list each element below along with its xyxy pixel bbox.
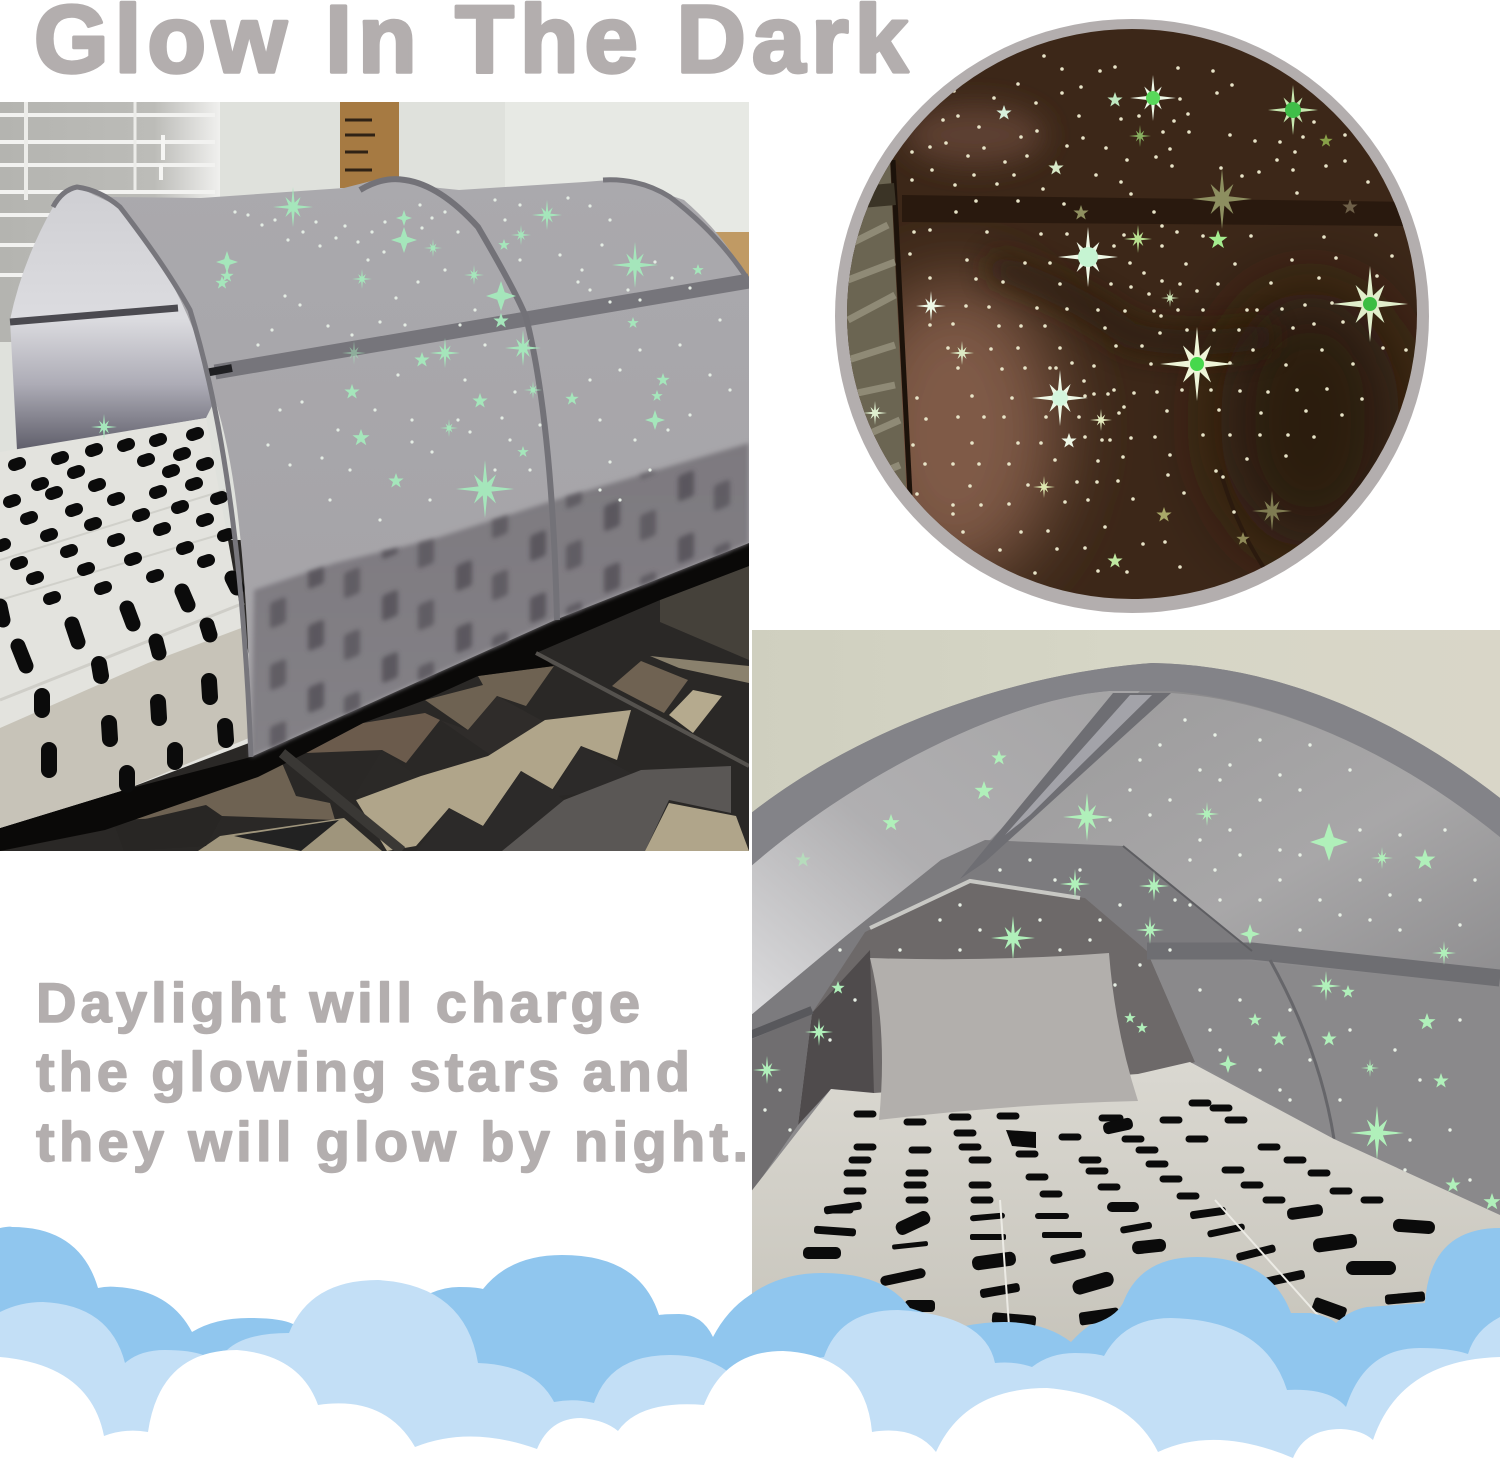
taupe triangles (425, 666, 554, 730)
back section seam (10, 308, 178, 322)
wall (752, 630, 1500, 812)
lower left wall (750, 1013, 812, 1195)
seams (750, 846, 1500, 1139)
grey zigzag (502, 766, 731, 851)
lower right wall (1147, 951, 1500, 1215)
back wall (812, 881, 1195, 1100)
body text: Daylight will charge (36, 971, 640, 1034)
rug strips (536, 653, 749, 766)
front clouds (0, 1350, 1500, 1460)
small dots (910, 56, 1406, 573)
glow stars on ceiling (753, 720, 1500, 1209)
photo: view inside the tent (752, 630, 1500, 1342)
small dots on ceiling (765, 720, 1475, 1180)
mid tunnel (750, 840, 1252, 1040)
bed with patterned quilt (0, 418, 255, 828)
rug and floor (0, 540, 749, 851)
body text: they will glow by night. (36, 1110, 748, 1173)
dark zigzag upper (468, 696, 497, 730)
lit fabric folds (850, 280, 1060, 580)
body text (36, 971, 748, 1173)
left roof panel (750, 691, 1140, 1016)
dark zigzag lower (448, 746, 582, 826)
right rim (603, 180, 750, 283)
beige corner (645, 803, 749, 851)
tent base (750, 663, 1500, 1260)
glow stars on tent (91, 187, 730, 520)
right roof panel (1008, 693, 1500, 962)
bed (750, 1062, 1500, 1460)
front rim (53, 187, 251, 757)
beige lower left (198, 818, 382, 851)
side panel (847, 164, 906, 488)
back clouds (0, 1227, 1500, 1460)
cloud border (0, 1227, 1500, 1460)
glowing stars (863, 75, 1408, 567)
seams (902, 195, 1417, 226)
circular inset: stars glowing in the dark (835, 19, 1430, 613)
small dots on tent (235, 198, 730, 520)
under-bed shadow (0, 540, 749, 851)
wall and window (0, 102, 749, 582)
tent back section (10, 187, 215, 450)
middle clouds (0, 1280, 1500, 1460)
photo: tent on bed in daylight (0, 102, 750, 851)
beige zigzag (356, 710, 631, 851)
strut (960, 693, 1171, 879)
tent body (53, 178, 750, 757)
middle rim (360, 179, 557, 620)
roof rim band (750, 663, 1500, 867)
body text: the glowing stars and (36, 1040, 690, 1103)
pillow (870, 953, 1138, 1120)
inset ring (835, 19, 1429, 613)
dark tent fabric (840, 20, 1430, 610)
shadowed lower fabric (251, 443, 749, 757)
zip seam (215, 281, 749, 372)
